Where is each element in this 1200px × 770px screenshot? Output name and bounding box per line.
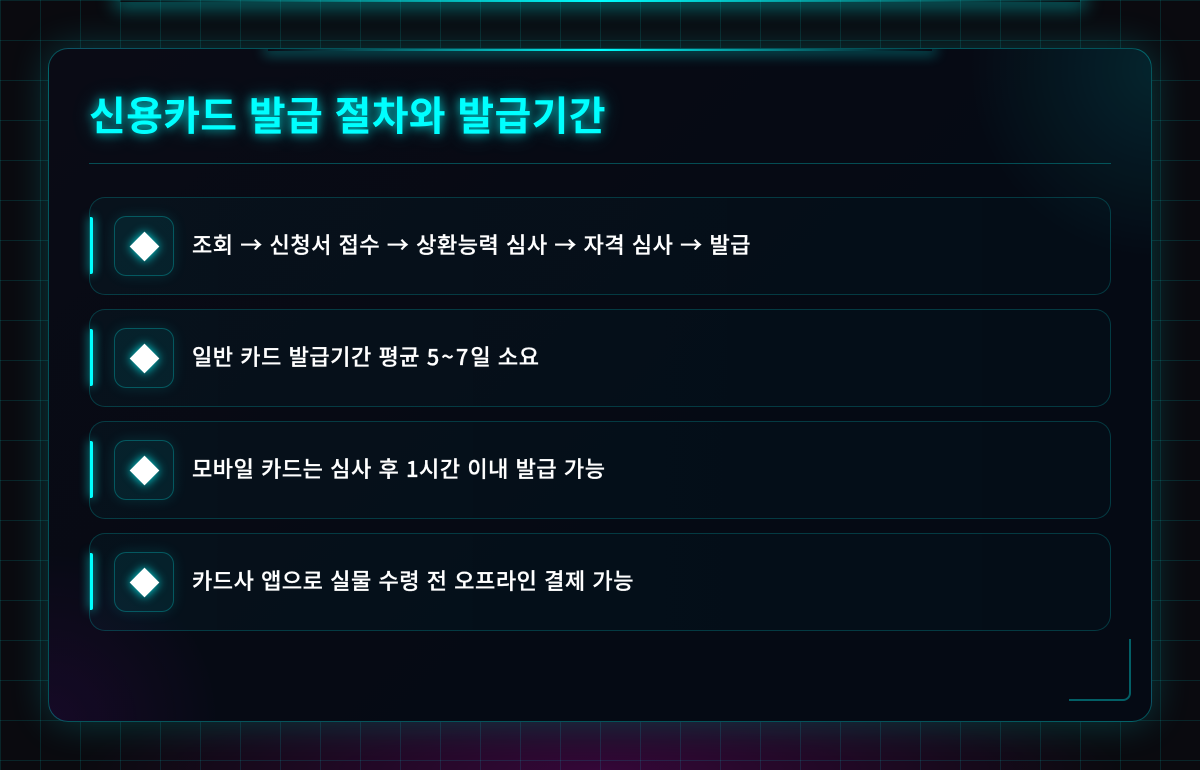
list item: issuance process bbox=[89, 197, 1111, 295]
list item: mobile card bbox=[89, 421, 1111, 519]
accent bar bbox=[90, 217, 93, 274]
icon: diamond bbox=[114, 328, 174, 388]
item text: 모바일 카드는 심사 후 1시간 이내 발급 가능 bbox=[192, 452, 606, 484]
icon: diamond bbox=[114, 440, 174, 500]
card top glowing bar bbox=[268, 49, 932, 51]
item text: 카드사 앱으로 실물 수령 전 오프라인 결제 가능 bbox=[192, 564, 634, 596]
accent bar bbox=[90, 441, 93, 498]
title: 신용카드 발급 절차와 발급기간 bbox=[89, 84, 606, 142]
accent bar bbox=[90, 329, 93, 386]
list item: standard issuance period bbox=[89, 309, 1111, 407]
icon: diamond bbox=[114, 552, 174, 612]
item text: 조회 → 신청서 접수 → 상환능력 심사 → 자격 심사 → 발급 bbox=[192, 228, 751, 260]
corner bracket bbox=[1069, 639, 1131, 701]
list item: offline payment bbox=[89, 533, 1111, 631]
top glowing bar bbox=[120, 0, 1080, 2]
icon: diamond bbox=[114, 216, 174, 276]
accent bar bbox=[90, 553, 93, 610]
item text: 일반 카드 발급기간 평균 5~7일 소요 bbox=[192, 340, 540, 372]
